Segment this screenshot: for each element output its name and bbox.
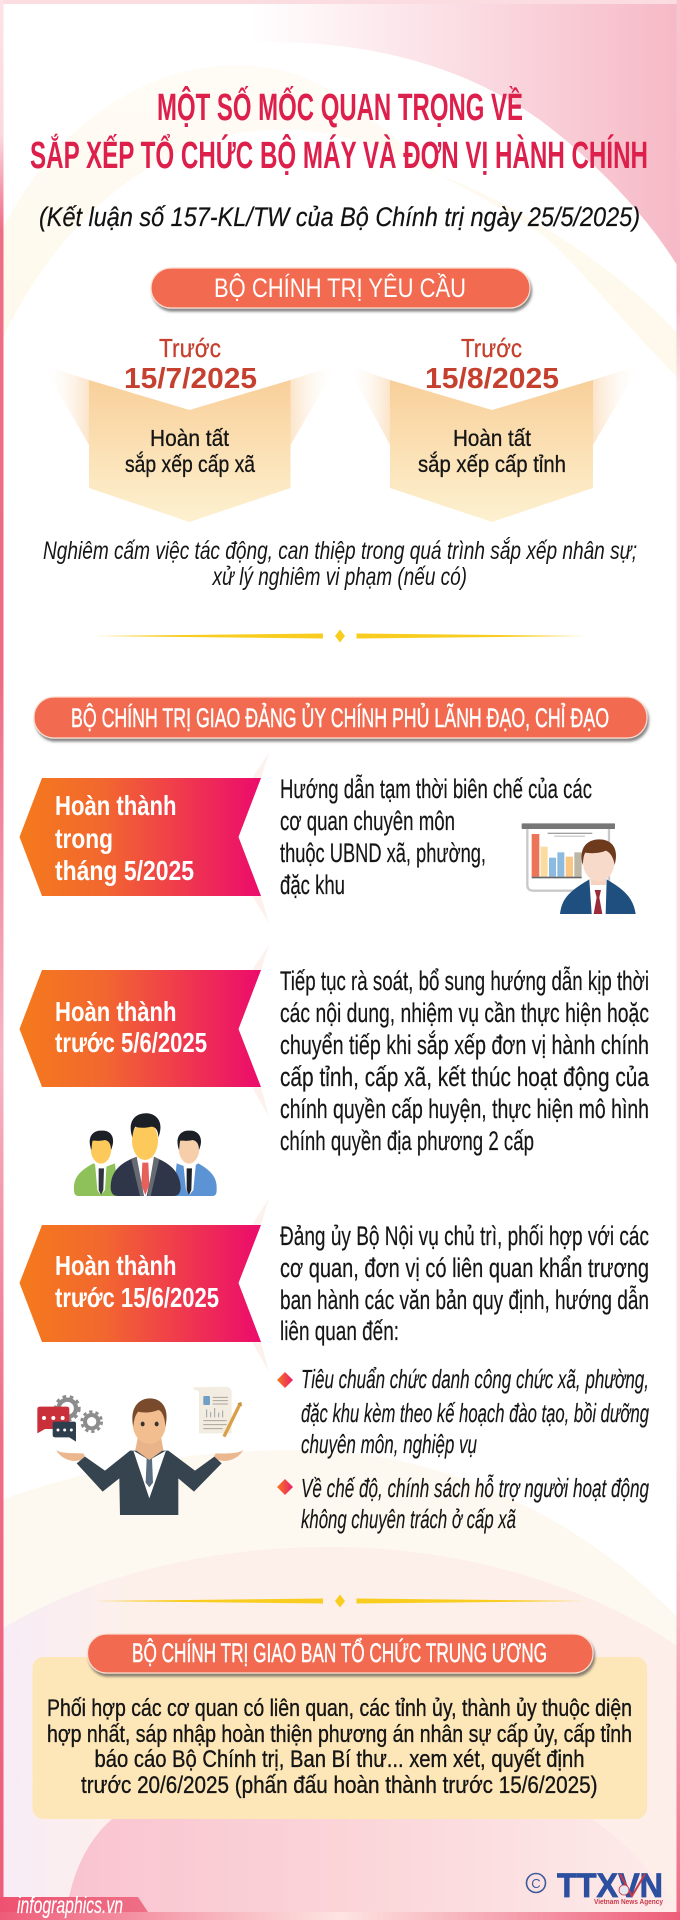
panel: deadline 15/8/2025: Trước: [461, 333, 522, 363]
source tab: infographics.vn: [17, 1892, 123, 1918]
milestone tag: tháng 5/2025: trong: [55, 823, 113, 854]
text: task 3: [280, 1221, 649, 1346]
text: task 2: [280, 965, 650, 1156]
panel: Ban Tổ chức Trung ương: [32, 1634, 647, 1819]
milestone tag: tháng 5/2025: tháng 5/2025: [55, 855, 194, 886]
panel: deadline 15/7/2025: 15/7/2025: [124, 363, 257, 395]
prohibition note: xử lý nghiêm vi phạm (nếu có): [212, 563, 467, 591]
title: [30, 84, 648, 177]
panel body text: [47, 1695, 632, 1799]
milestone tag: trước 5/6/2025: [20, 970, 261, 1087]
bullet list: [277, 1364, 649, 1534]
text: task 1: [280, 773, 592, 900]
heading: Bộ Chính trị yêu cầu: BỘ CHÍNH TRỊ YÊU CẦU: [214, 272, 466, 303]
milestone tag: tháng 5/2025: [20, 778, 261, 896]
bullet list: chuyên môn, nghiệp vụ: [301, 1429, 477, 1459]
text: task 1: cơ quan chuyên môn: [280, 806, 455, 836]
icon: official with chat, gears and document: [37, 1387, 243, 1515]
logo: TTXVN: Vietnam News Agency: [594, 1899, 663, 1906]
milestone tag: trước 15/6/2025: Hoàn thành: [55, 1250, 176, 1281]
panel: deadline 15/7/2025: Hoàn tất: [150, 425, 230, 451]
milestone tag: trước 5/6/2025: Hoàn thành: [55, 996, 176, 1027]
icon: presenter with chart: [522, 823, 636, 914]
panel body text: báo cáo Bộ Chính trị, Ban Bí thư... xem xét, quyết định: [94, 1746, 584, 1773]
logo: TTXVN: TTXVN: [557, 1867, 663, 1905]
milestone tag: trước 15/6/2025: [20, 1225, 261, 1342]
panel: deadline 15/7/2025: [43, 333, 337, 522]
panel: deadline 15/8/2025: [347, 333, 640, 522]
panel body text: trước 20/6/2025 (phấn đấu hoàn thành trước 15/6/2025): [81, 1772, 598, 1799]
panel: deadline 15/8/2025: 15/8/2025: [425, 363, 559, 395]
panel: deadline 15/8/2025: Hoàn tất: [453, 425, 532, 451]
panel: deadline 15/8/2025: sắp xếp cấp tỉnh: [418, 451, 566, 477]
milestone tag: tháng 5/2025: Hoàn thành: [55, 790, 176, 821]
icon: three officials: [74, 1113, 217, 1196]
milestone tag: trước 5/6/2025: trước 5/6/2025: [55, 1027, 207, 1058]
text: task 2: chính quyền địa phương 2 cấp: [280, 1126, 534, 1156]
text: task 1: đặc khu: [280, 870, 345, 900]
text: task 3: liên quan đến:: [280, 1316, 399, 1346]
prohibition note: [43, 536, 637, 591]
logo: TTXVN: C: [531, 1876, 541, 1891]
text: task 1: thuộc UBND xã, phường,: [280, 838, 486, 868]
panel: deadline 15/7/2025: sắp xếp cấp xã: [125, 451, 255, 477]
panel: deadline 15/7/2025: Trước: [159, 333, 221, 363]
bullet list: không chuyên trách ở cấp xã: [301, 1504, 516, 1534]
milestone tag: trước 15/6/2025: trước 15/6/2025: [55, 1282, 219, 1313]
heading: Bộ Chính trị giao Đảng ủy Chính phủ: [34, 697, 647, 738]
heading: Bộ Chính trị yêu cầu: [151, 268, 530, 308]
heading: Bộ Chính trị giao Ban Tổ chức Trung ương: [88, 1634, 593, 1673]
